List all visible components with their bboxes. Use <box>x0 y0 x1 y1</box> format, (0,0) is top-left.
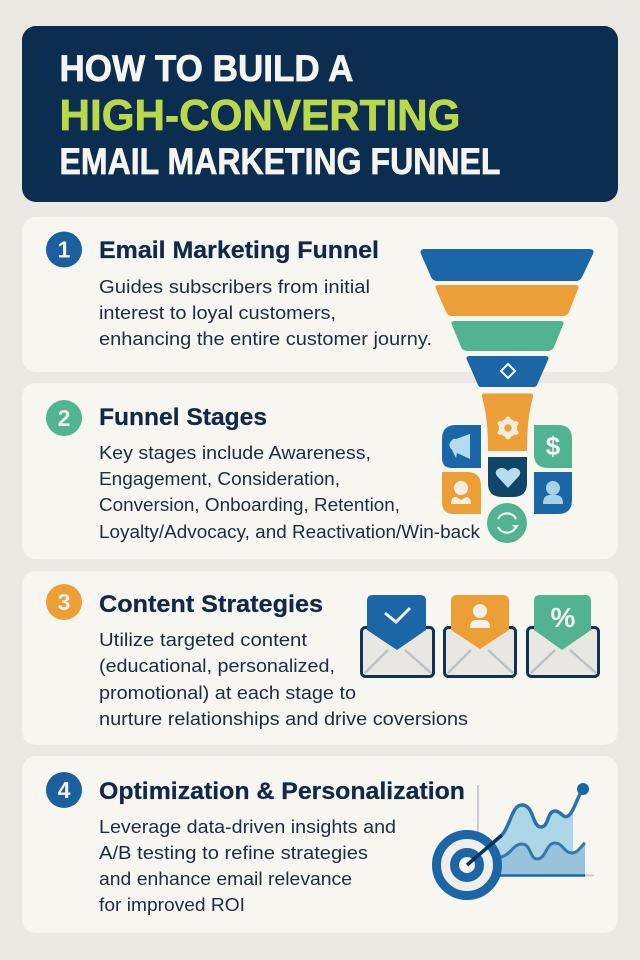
body 4: and enhance email relevance <box>99 868 352 889</box>
body 4 <box>99 816 396 915</box>
body 1 <box>99 276 432 349</box>
badge 2 <box>46 400 82 436</box>
email envelopes <box>362 595 598 676</box>
envelope: percent: % <box>551 602 576 633</box>
icon: person orange <box>442 472 481 514</box>
funnel spout with gear <box>482 394 533 451</box>
panel: email marketing funnel <box>22 217 618 372</box>
body 3: promotional) at each stage to <box>99 682 356 703</box>
header banner <box>22 26 618 202</box>
body 2: Key stages include Awareness, <box>99 442 371 463</box>
heading 2: Funnel Stages <box>99 404 267 431</box>
body 3 <box>99 629 468 729</box>
body 4: A/B testing to refine strategies <box>99 842 368 863</box>
badge 1: 1 <box>58 236 71 262</box>
icon: dollar: $ <box>546 431 561 461</box>
trend arrow <box>467 783 589 865</box>
body 2: Loyalty/Advocacy, and Reactivation/Win-back <box>99 521 481 542</box>
badge 4 <box>46 772 82 808</box>
heading 3: Content Strategies <box>99 591 323 618</box>
envelope: person <box>444 595 516 676</box>
icon: megaphone <box>442 425 481 468</box>
badge 4: 4 <box>58 777 71 803</box>
body 1: interest to loyal customers, <box>99 302 336 323</box>
body 4: for improved ROI <box>99 894 245 915</box>
title: HOW TO BUILD A <box>60 48 354 89</box>
body 1: enhancing the entire customer journy. <box>99 328 432 349</box>
badge 3: 3 <box>58 589 70 615</box>
funnel tier 4 <box>466 356 549 387</box>
target <box>436 834 498 896</box>
body 1: Guides subscribers from initial <box>99 276 370 297</box>
funnel tier 3 <box>451 321 564 351</box>
area chart <box>490 805 585 876</box>
body 2: Engagement, Consideration, <box>99 468 340 489</box>
panel: optimization and personalization <box>22 756 618 933</box>
heading 1: Email Marketing Funnel <box>99 237 379 264</box>
badge 1 <box>46 232 82 268</box>
icon: heart <box>488 457 527 497</box>
funnel graphic <box>420 249 594 543</box>
heading 4: Optimization & Personalization <box>99 778 465 805</box>
icon: reactivation circle <box>487 503 527 543</box>
panel: content strategies <box>22 571 618 745</box>
funnel tier 1 <box>420 249 594 281</box>
envelope: check <box>362 595 434 676</box>
body 2: Conversion, Onboarding, Retention, <box>99 494 400 515</box>
body 3: Utilize targeted content <box>99 629 307 650</box>
envelope: percent <box>528 595 598 676</box>
badge 2: 2 <box>58 405 70 431</box>
chart with target <box>436 783 594 896</box>
body 2 <box>99 442 481 542</box>
icon: person blue <box>534 472 572 514</box>
icon: dollar <box>534 425 572 468</box>
axes <box>478 785 594 876</box>
panel: funnel stages <box>22 383 618 559</box>
funnel tier 2 <box>435 285 579 316</box>
badge 3 <box>46 584 82 620</box>
title: HIGH-CONVERTING <box>60 91 460 140</box>
body 4: Leverage data-driven insights and <box>99 816 396 837</box>
title <box>60 48 500 182</box>
body 3: (educational, personalized, <box>99 655 335 676</box>
title: EMAIL MARKETING FUNNEL <box>60 141 500 182</box>
body 3: nurture relationships and drive coversions <box>99 708 468 729</box>
